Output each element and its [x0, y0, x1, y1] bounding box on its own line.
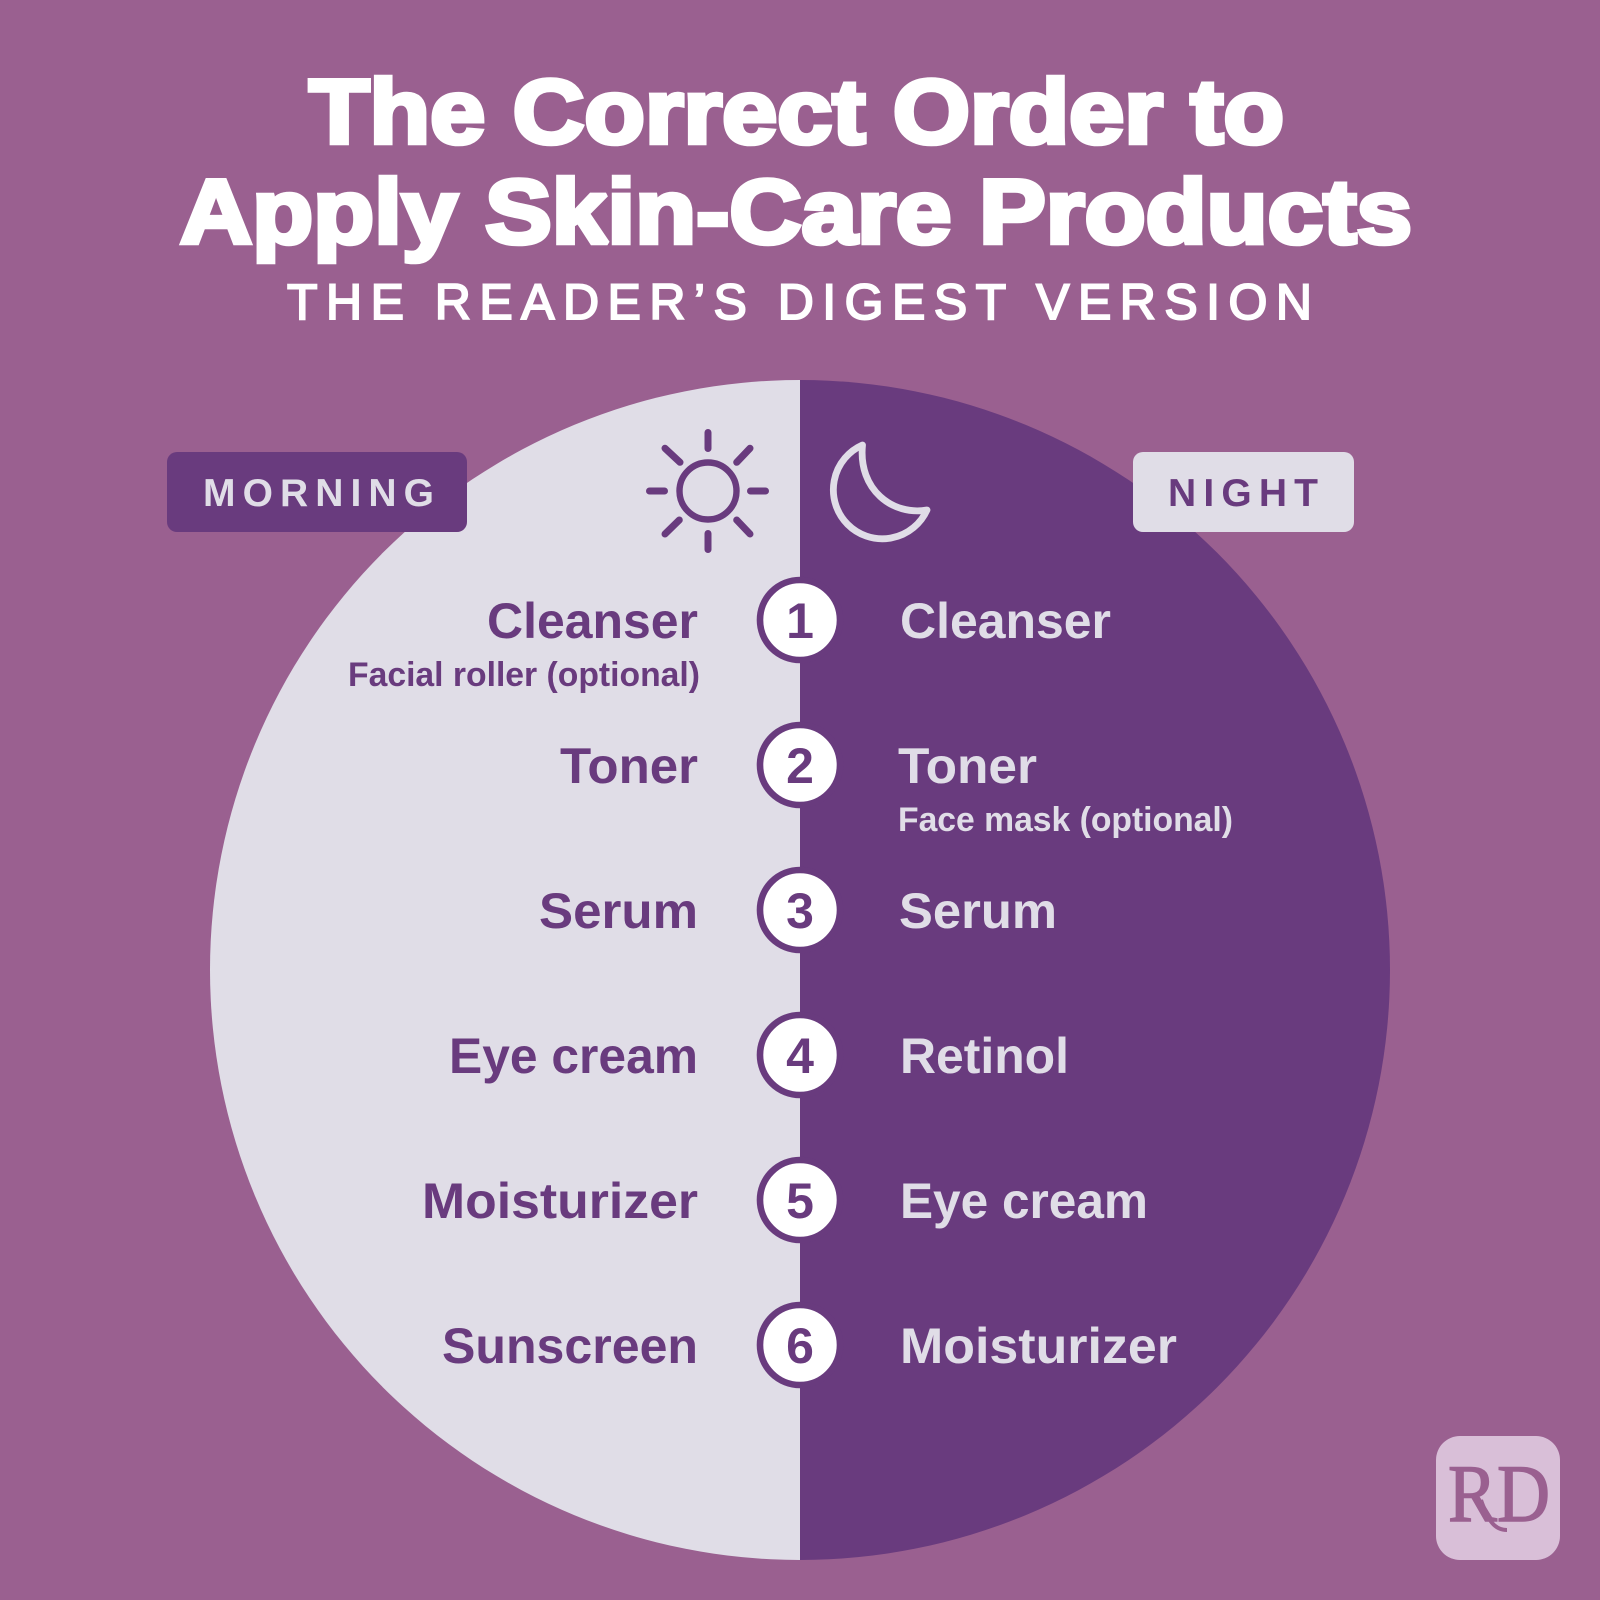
night step 5: Eye cream — [900, 1173, 1148, 1229]
number badge 2: 2 — [786, 738, 814, 794]
number badge 1: 1 — [786, 593, 814, 649]
number badge 4: 4 — [786, 1028, 814, 1084]
logo: RD: RD — [1448, 1448, 1550, 1539]
night step 2: Face mask (optional) — [898, 801, 1233, 839]
number badge 6: 6 — [786, 1318, 814, 1374]
number badge 3: 3 — [786, 883, 814, 939]
morning step 1: Facial roller (optional) — [348, 656, 700, 694]
step 4 — [449, 1015, 1069, 1095]
night label — [1133, 452, 1354, 532]
number badge 2 — [760, 725, 840, 805]
number badge 3 — [760, 870, 840, 950]
logo: RD — [1436, 1436, 1560, 1560]
night step 3: Serum — [899, 883, 1057, 939]
morning step 5: Moisturizer — [422, 1173, 698, 1229]
number badge 6 — [760, 1305, 840, 1385]
morning step 2: Toner — [560, 738, 698, 794]
step 5 — [422, 1160, 1148, 1240]
title: Apply Skin-Care Products — [180, 162, 1412, 263]
morning step 4: Eye cream — [449, 1028, 698, 1084]
night step 2: Toner — [898, 738, 1037, 794]
morning label: MORNING — [203, 472, 434, 515]
title — [180, 62, 1412, 263]
step 2 — [560, 725, 1233, 839]
night step 4: Retinol — [900, 1028, 1069, 1084]
morning step 1: Cleanser — [487, 593, 698, 649]
number badge 5 — [760, 1160, 840, 1240]
morning step 6: Sunscreen — [442, 1318, 698, 1374]
night step 2 — [898, 738, 1233, 839]
number badge 5: 5 — [786, 1173, 814, 1229]
icon: moon — [833, 445, 927, 539]
morning step 3: Serum — [539, 883, 698, 939]
night label: NIGHT — [1168, 472, 1318, 515]
night half of circle — [800, 380, 1390, 1560]
morning step 1 — [348, 593, 700, 694]
panel: split circle — [210, 380, 1390, 1560]
number badge 1 — [760, 580, 840, 660]
title: The Correct Order to — [309, 62, 1284, 163]
step 3 — [539, 870, 1057, 950]
night step 1: Cleanser — [900, 593, 1111, 649]
subtitle: THE READER’S DIGEST VERSION — [287, 274, 1312, 330]
step 6 — [442, 1305, 1177, 1385]
morning label — [167, 452, 467, 532]
morning half of circle — [210, 380, 800, 1560]
night step 6: Moisturizer — [900, 1318, 1177, 1374]
number badge 4 — [760, 1015, 840, 1095]
step 1 — [348, 580, 1111, 694]
icon: sun — [650, 432, 766, 550]
